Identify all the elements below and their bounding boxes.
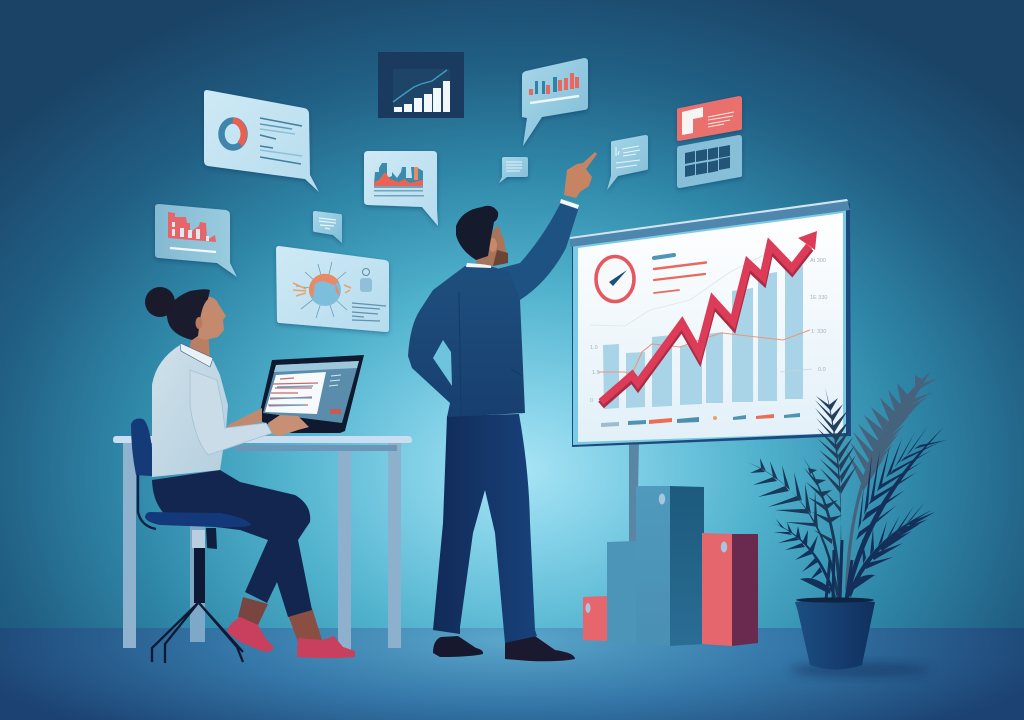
card: red summary [677,96,742,141]
gap at hip [433,340,452,386]
trend line [393,70,447,102]
back leg [190,525,205,642]
red bars [168,212,216,242]
axis labels: 1.0 [590,345,598,351]
desk top [113,436,412,443]
gauge icon [596,256,634,302]
left frond [747,458,839,595]
woman at laptop [131,287,355,663]
axis labels: 0 [590,398,593,404]
desk underside [235,445,397,451]
potted plant [747,372,947,677]
lower right frond [848,502,935,597]
shirt body [152,345,228,477]
lower left frond [773,519,836,597]
chair column and base [192,530,205,548]
trousers [152,470,312,617]
white bars [394,81,450,112]
dark right frond [845,426,947,598]
hair [166,289,210,340]
blue bars [374,163,423,184]
presentation board [570,199,851,545]
board surface [578,213,843,442]
small speech bubble [313,211,342,243]
tall blue block side [670,486,704,646]
bar chart [603,265,803,409]
axis labels: 1.5 [592,370,600,376]
small right leaf [851,575,875,590]
small speech bubble [499,157,528,183]
left hand [228,408,262,428]
screen sidebar [329,375,341,386]
axis labels: At 300 [810,258,826,264]
grey feather frond [845,372,938,590]
axis labels: 0.0 [818,367,826,373]
tall center frond [815,387,857,600]
jacket details [459,292,522,416]
axis labels: 1E 330 [810,295,827,301]
ankles [238,597,268,625]
desk legs [123,443,136,648]
trousers [433,414,537,643]
document on screen [265,372,326,414]
donut chart [222,120,244,148]
neck [188,330,210,358]
shoes [433,636,483,657]
jacket [408,266,525,417]
screen [263,361,359,423]
growth arrow [601,231,817,405]
axis labels [590,258,827,404]
panel: globe data card [276,246,389,332]
ear [196,317,202,329]
legend dashes [601,413,800,427]
desk [113,436,412,650]
pot [795,599,875,670]
hair bun [145,287,175,317]
man pointing [408,152,597,661]
text lines [352,303,386,321]
speech bubble: donut chart report [204,90,319,192]
speech bubble: red bar chart [155,204,237,277]
chair back [131,419,154,476]
speech bubble: notes [607,135,648,190]
bar blocks [583,486,758,646]
stems [826,540,852,600]
beard shade [493,250,508,266]
bars [529,73,579,95]
speech bubble: area chart [364,151,438,226]
hand [564,152,597,198]
axis labels: 1: 330 [811,329,826,335]
left blue block [607,541,636,643]
shoes [227,617,274,652]
collar [466,263,491,268]
card: keypad grid [677,135,742,188]
tall blue block front [636,486,670,646]
red block front [702,533,732,646]
shirt arm [190,370,272,455]
caption bar [170,248,216,252]
red block side [732,534,758,646]
panel: dark growth chart [378,52,464,118]
collar [180,343,213,367]
board frame [572,203,851,447]
center-left frond [803,457,842,595]
thin trend lines [590,252,812,374]
pot shadow [790,663,930,677]
small red block [583,596,607,641]
floor [0,628,1024,720]
orange splashes [293,283,351,296]
ear [489,238,497,252]
right hand [268,415,309,436]
chair seat [145,512,251,527]
neck and face [476,225,508,266]
cuff [560,199,579,209]
raised arm [493,200,579,312]
small left leaf [800,578,831,594]
face [190,297,226,340]
board stand [629,440,639,545]
board headline lines [654,255,706,293]
red area [374,172,423,186]
hair [456,206,498,260]
laptop [258,355,364,433]
globe rays [296,262,347,318]
speech bubble: bar chart [522,58,588,146]
gauge tag [362,268,370,276]
laptop body [258,355,364,433]
board top bar [570,199,850,247]
globe [309,274,341,306]
report text lines [260,118,302,164]
